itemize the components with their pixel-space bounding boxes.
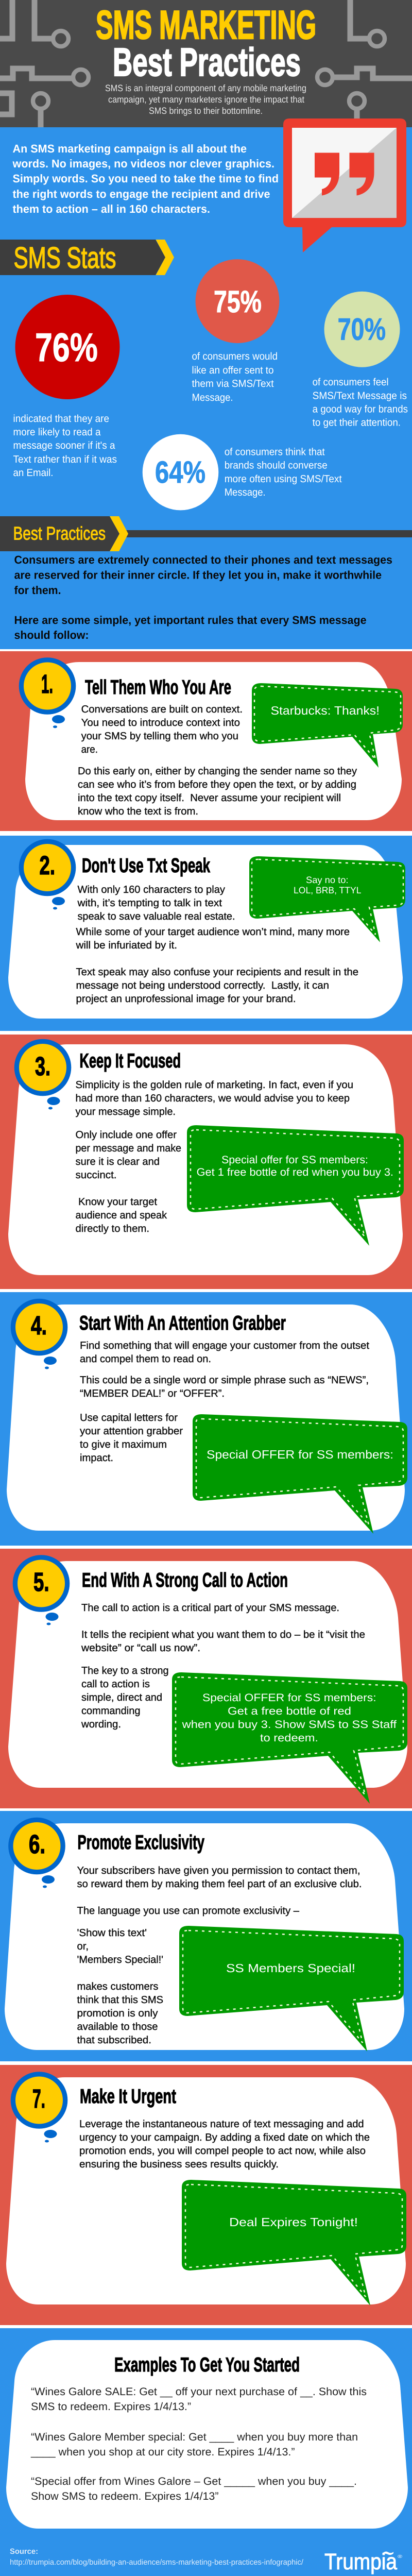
body text: simple, direct and [81, 1692, 162, 1703]
stat: 70%: a good way for brands [313, 404, 408, 415]
logo: Trumpia: ® [398, 2554, 402, 2559]
body text: Conversations are built on context. [81, 704, 243, 715]
body text: commanding [81, 1705, 140, 1717]
body text: impact. [80, 1452, 113, 1464]
body text: website” or “call us now”. [81, 1642, 200, 1654]
speech bubble [179, 1926, 404, 2052]
source credit [10, 2547, 304, 2567]
body text: The key to a strong [81, 1665, 169, 1676]
number badge 3: 3. [35, 1052, 50, 1081]
body text [78, 704, 357, 817]
body text: You need to introduce context into [81, 717, 240, 728]
body text: sure it is clear and [75, 1156, 160, 1167]
body text: This could be a single word or simple phrase such as “NEWS”, [80, 1375, 369, 1386]
body text: your attention grabber [80, 1426, 183, 1437]
stat: 64% [143, 434, 342, 510]
body text [81, 1602, 365, 1730]
body text: Leverage the instantaneous nature of text messaging and add [79, 2119, 364, 2130]
speech bubble: when you buy 3. Show SMS to SS Staff [181, 1719, 397, 1731]
body text: with, it’s tempting to talk in text [77, 897, 222, 909]
body text: your SMS by telling them who you [81, 731, 238, 742]
body text: Know your target [78, 1196, 157, 1208]
speech bubble: Special offer for SS members: [221, 1154, 368, 1166]
speech bubble [182, 2180, 406, 2306]
stat: 64%: 64% [155, 455, 205, 489]
number badge 5 [13, 1555, 70, 1625]
intro text block: them to action – all in 160 characters. [12, 202, 210, 215]
panel: tip 7 [0, 2065, 412, 2325]
body text: message not being understood correctly. Lastly, it can [76, 980, 329, 991]
number badge 1 [19, 657, 76, 728]
speech bubble: Special OFFER for SS members: [202, 1692, 376, 1704]
body text: Find something that will engage your customer from the outset [80, 1340, 369, 1351]
speech bubble: Special OFFER for SS members: [207, 1448, 393, 1461]
body text: directly to them. [75, 1223, 149, 1234]
body text: and compel them to read on. [80, 1353, 211, 1365]
stat: 70%: SMS/Text Message is [313, 391, 407, 402]
body text: 'Show this text' [77, 1927, 147, 1939]
intro text block [12, 142, 279, 215]
stat: 75%: them via SMS/Text [192, 378, 274, 389]
body text [75, 1079, 353, 1234]
body text: Your subscribers have given you permission to contact them, [77, 1865, 360, 1876]
speech bubble: Say no to: [306, 875, 348, 885]
body text: 'Members Special!' [77, 1954, 163, 1965]
example messages: ____ when you shop at our city store. Expires 1/4/13.” [30, 2446, 295, 2458]
body text: your message simple. [75, 1106, 176, 1117]
body text [79, 2119, 370, 2170]
intro text block: the right words to engage the recipient and drive [12, 188, 270, 200]
panel: examples [0, 2328, 412, 2576]
stat: 75% [192, 259, 279, 403]
body text: can see who it’s from before they open the text, or by adding [78, 779, 356, 790]
intro text block: An SMS marketing campaign is all about the [12, 142, 247, 155]
banner: Best Practices [0, 516, 412, 551]
speech bubble: to redeem. [260, 1732, 318, 1744]
body text: promotion ends, you will compel people to act now, while also [79, 2145, 366, 2157]
stat: 76%: Text rather than if it was [13, 454, 117, 465]
stat: 76%: indicated that they are [13, 413, 109, 425]
stat: 64%: more often using SMS/Text [225, 473, 342, 485]
body text: will be infuriated by it. [75, 940, 177, 951]
number badge 1: 1. [41, 669, 53, 699]
speech bubble [193, 1414, 407, 1534]
body text: wording. [81, 1719, 121, 1730]
body text: The language you use can promote exclusivity – [77, 1905, 300, 1917]
body text: so reward them by making them feel part of an exclusive club. [77, 1878, 362, 1890]
body text: had more than 160 characters, we would advise you to keep [75, 1093, 350, 1104]
body text: With only 160 characters to play [77, 884, 225, 895]
body text: that subscribed. [77, 2035, 151, 2046]
example messages: Show SMS to redeem. Expires 1/4/13” [31, 2490, 218, 2502]
body text: to give it maximum [80, 1439, 167, 1450]
heading: Don't Use Txt Speak [82, 855, 210, 877]
heading: Promote Exclusivity [77, 1832, 204, 1854]
panel: intro and stats background [0, 127, 412, 649]
source credit: Source: [10, 2547, 38, 2556]
intro text block: words. No images, no videos nor clever graphics. [12, 157, 274, 170]
stat: 70% [313, 292, 408, 429]
body text: per message and make [75, 1143, 181, 1154]
panel: tip 6 [0, 1811, 412, 2061]
body text: Use capital letters for [80, 1412, 178, 1423]
body text: succinct. [75, 1170, 116, 1181]
body text: audience and speak [75, 1210, 167, 1221]
number badge 2: 2. [39, 851, 55, 880]
number badge 7: 7. [32, 2084, 45, 2113]
banner: SMS Stats: SMS Stats [13, 241, 116, 275]
header intro text: SMS brings to their bottomline. [149, 106, 263, 116]
body text: “MEMBER DEAL!” or “OFFER”. [80, 1388, 225, 1399]
body text: The call to action is a critical part of your SMS message. [81, 1602, 339, 1614]
body text: Simplicity is the golden rule of marketing. In fact, even if you [75, 1079, 353, 1091]
body text [80, 1340, 369, 1464]
panel: tip 5 [0, 1549, 412, 1808]
icon: quote speech bubble [283, 118, 406, 252]
panel: tip 3 [0, 1035, 412, 1289]
stat: 76%: 76% [35, 325, 98, 370]
body text: into the text copy itself. Never assume your recipient will [78, 792, 341, 804]
speech bubble [249, 856, 405, 942]
stat: 64%: of consumers think that [225, 447, 325, 458]
body text: are. [81, 744, 98, 755]
best practices intro text: Here are some simple, yet important rules that every SMS message [14, 614, 367, 626]
number badge 3 [14, 1039, 71, 1110]
number badge 4 [11, 1299, 67, 1369]
subtitle heading: Best Practices [113, 40, 301, 84]
number badge 6: 6. [29, 1829, 45, 1859]
body text: think that this SMS [77, 1994, 163, 2006]
panel: tip 1 [0, 651, 412, 831]
body text: It tells the recipient what you want them to do – be it “visit the [81, 1629, 365, 1640]
speech bubble [252, 683, 403, 768]
example messages: “Special offer from Wines Galore – Get _____ when you buy ____. [31, 2476, 357, 2487]
speech bubble: Get a free bottle of red [228, 1705, 351, 1717]
heading: Keep It Focused [79, 1050, 181, 1072]
header panel [0, 0, 412, 127]
stat: 76%: message sooner if it's a [13, 440, 115, 451]
stat: 64%: Message. [225, 487, 266, 498]
stat: 70%: to get their attention. [313, 417, 401, 429]
heading: Start With An Attention Grabber [79, 1312, 286, 1334]
stat: 76%: more likely to read a [13, 427, 101, 438]
stat: 70%: 70% [338, 312, 386, 346]
number badge 6 [8, 1818, 65, 1888]
number badge 4: 4. [31, 1311, 47, 1340]
logo: Trumpia: Trumpia [324, 2549, 397, 2574]
example messages [30, 2386, 367, 2502]
body text: Do this early on, either by changing the sender name so they [78, 766, 357, 777]
body text: Only include one offer [75, 1129, 177, 1141]
best practices intro text: are reserved for their inner circle. If they let you in, make it worthwhile [14, 569, 382, 581]
best practices intro text: Consumers are extremely connected to their phones and text messages [14, 553, 392, 566]
stat: 75%: like an offer sent to [192, 365, 274, 376]
stat: 70%: of consumers feel [313, 377, 389, 388]
speech bubble: Deal Expires Tonight! [229, 2215, 358, 2229]
body text: or, [77, 1941, 89, 1952]
speech bubble: SS Members Special! [226, 1961, 355, 1975]
speech bubble: Get 1 free bottle of red when you buy 3. [197, 1166, 393, 1178]
body text: makes customers [77, 1981, 159, 1992]
source credit: http://trumpia.com/blog/building-an-audience/sms-marketing-best-practices-infographic/ [10, 2558, 304, 2567]
best practices intro text [14, 553, 392, 641]
body text: urgency to your campaign. By adding a fixed date on which the [79, 2132, 370, 2143]
example messages: SMS to redeem. Expires 1/4/13.” [31, 2401, 191, 2413]
body text: available to those [77, 2021, 158, 2032]
number badge 7 [11, 2072, 67, 2142]
best practices intro text: should follow: [14, 629, 89, 641]
heading: Tell Them Who You Are [85, 676, 231, 699]
heading: Examples To Get You Started [114, 2354, 300, 2376]
best practices intro text: for them. [14, 584, 61, 597]
body text [77, 1865, 362, 2046]
body text: While some of your target audience won’t mind, many more [76, 926, 350, 938]
number badge 2 [19, 839, 76, 910]
stat: 76%: an Email. [13, 467, 54, 479]
stat: 75%: of consumers would [192, 351, 278, 362]
panel: tip 4 [0, 1292, 412, 1546]
stat: 75%: 75% [214, 284, 262, 319]
example messages: “Wines Galore SALE: Get __ off your next purchase of __. Show this [31, 2386, 367, 2398]
banner: Best Practices: Best Practices [13, 522, 106, 544]
header intro text: SMS is an integral component of any mobile marketing [105, 83, 306, 93]
header intro text: campaign, yet many marketers ignore the impact that [108, 94, 304, 105]
body text: call to action is [81, 1679, 150, 1690]
heading: End With A Strong Call to Action [82, 1569, 288, 1591]
number badge 5: 5. [33, 1567, 49, 1597]
body text: speak to save valuable real estate. [77, 911, 235, 922]
speech bubble: LOL, BRB, TTYL [294, 885, 362, 895]
heading: Make It Urgent [80, 2086, 176, 2108]
header intro text [105, 83, 306, 116]
body text: project an unprofessional image for your brand. [76, 993, 296, 1005]
speech bubble [187, 1125, 404, 1246]
stat: 75%: Message. [192, 392, 233, 403]
example messages: “Wines Galore Member special: Get ____ when you buy more than [31, 2431, 358, 2443]
speech bubble [172, 1672, 407, 1804]
body text [75, 884, 358, 1005]
body text: promotion is only [77, 2008, 158, 2019]
panel: tip 2 [0, 836, 412, 1031]
speech bubble: Starbucks: Thanks! [271, 704, 380, 717]
intro text block: Simply words. So you need to take the time to find [12, 172, 279, 185]
body text: ensuring the business sees results quickly. [79, 2159, 279, 2170]
body text: Text speak may also confuse your recipients and result in the [76, 967, 358, 978]
stat: 76% [13, 295, 119, 479]
body text: know who the text is from. [78, 806, 198, 817]
stat: 64%: brands should converse [225, 460, 328, 471]
